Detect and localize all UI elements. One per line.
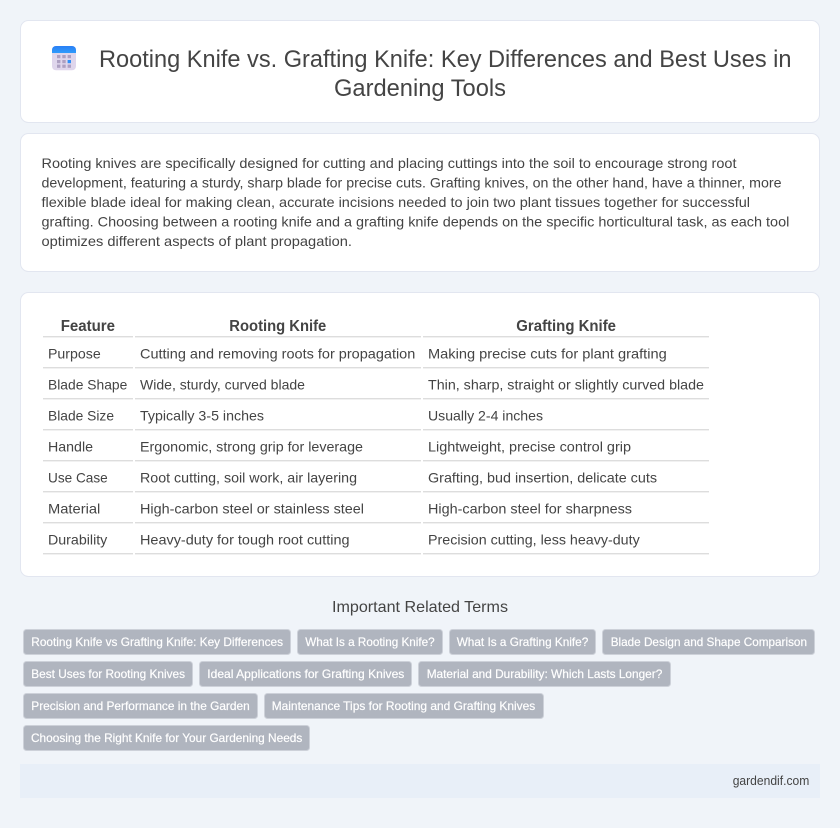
row: purpose: Purpose: [48, 345, 101, 361]
row: handle: Handle: [48, 438, 93, 454]
tag: [24, 630, 290, 654]
tag: [450, 630, 596, 654]
row: durability: Precision cutting, less heavy-duty: [428, 531, 640, 547]
tag: [24, 726, 310, 750]
tag: [24, 694, 258, 718]
tag: What Is a Rooting Knife?: [305, 635, 435, 649]
title: [99, 46, 792, 102]
tag: Precision and Performance in the Garden: [31, 699, 250, 713]
table header: [43, 318, 709, 337]
footer: gardendif.com: [733, 774, 809, 788]
row: handle: Lightweight, precise control grip: [428, 438, 631, 454]
row: purpose: Cutting and removing roots for propagation: [140, 345, 415, 361]
tag: [418, 662, 670, 686]
row: use case: Use Case: [48, 469, 108, 485]
row: handle: [43, 438, 709, 461]
tag: [298, 630, 442, 654]
tag: Maintenance Tips for Rooting and Grafting Knives: [272, 699, 535, 713]
panel: intro paragraph: [20, 134, 820, 272]
row: blade shape: Thin, sharp, straight or slightly curved blade: [428, 376, 704, 392]
row: material: Material: [48, 500, 100, 516]
row: durability: Durability: [48, 531, 107, 547]
row: handle: Ergonomic, strong grip for leverage: [140, 438, 363, 454]
row: blade size: Typically 3-5 inches: [140, 407, 264, 423]
panel: comparison table: [20, 292, 820, 576]
tag: [264, 694, 544, 718]
tag: Rooting Knife vs Grafting Knife: Key Differences: [31, 635, 283, 649]
panel: header: [20, 20, 820, 122]
row: durability: [43, 531, 709, 554]
title: Rooting Knife vs. Grafting Knife: Key Differences and Best Uses in: [99, 46, 792, 73]
table header: Rooting Knife: [229, 318, 326, 335]
tag: Blade Design and Shape Comparison: [611, 635, 807, 649]
row: purpose: Making precise cuts for plant grafting: [428, 345, 667, 361]
row: use case: Grafting, bud insertion, delicate cuts: [428, 469, 657, 485]
tag: Ideal Applications for Grafting Knives: [207, 667, 404, 681]
tag: [200, 662, 412, 686]
row: material: High-carbon steel for sharpness: [428, 500, 632, 516]
heading: related terms: Important Related Terms: [332, 599, 508, 616]
row: blade shape: Blade Shape: [48, 376, 128, 392]
row: use case: [43, 469, 709, 492]
row: use case: Root cutting, soil work, air layering: [140, 469, 357, 485]
text block: description: Rooting knives are specifically designed for cutting and placing cuttings into the soil to encourage strong root: [42, 155, 737, 171]
related term tags: [24, 630, 814, 750]
row: material: High-carbon steel or stainless steel: [140, 500, 364, 516]
row: purpose: [43, 345, 709, 368]
text block: description: optimizes different aspects of plant propagation.: [42, 233, 352, 249]
row: material: [43, 500, 709, 523]
text block: description: flexible blade ideal for making clean, accurate incisions needed to join two plant tissues together for successful: [42, 194, 750, 210]
row: blade size: Usually 2-4 inches: [428, 407, 543, 423]
tag: [24, 662, 192, 686]
tag: [602, 630, 814, 654]
title: Gardening Tools: [334, 75, 506, 102]
footer: [20, 764, 820, 798]
icon: calendar: [52, 46, 76, 70]
row: blade size: Blade Size: [48, 407, 114, 423]
row: durability: Heavy-duty for tough root cutting: [140, 531, 350, 547]
row: blade shape: Wide, sturdy, curved blade: [140, 376, 305, 392]
table header: Feature: [61, 318, 115, 335]
text block: description: [42, 155, 789, 249]
row: blade shape: [43, 376, 709, 399]
tag: Material and Durability: Which Lasts Longer?: [427, 667, 663, 681]
tag: What Is a Grafting Knife?: [457, 635, 589, 649]
row: blade size: [43, 407, 709, 430]
tag: Choosing the Right Knife for Your Gardening Needs: [31, 731, 302, 745]
text block: description: grafting. Choosing between a rooting knife and a grafting knife depends on the specific horticultural task, as each tool: [42, 214, 789, 230]
tag: Best Uses for Rooting Knives: [31, 667, 185, 681]
text block: description: development, featuring a sturdy, sharp blade for precise cuts. Grafting knives, on the other hand, have a thinner, more: [42, 174, 782, 190]
table header: Grafting Knife: [516, 318, 616, 335]
